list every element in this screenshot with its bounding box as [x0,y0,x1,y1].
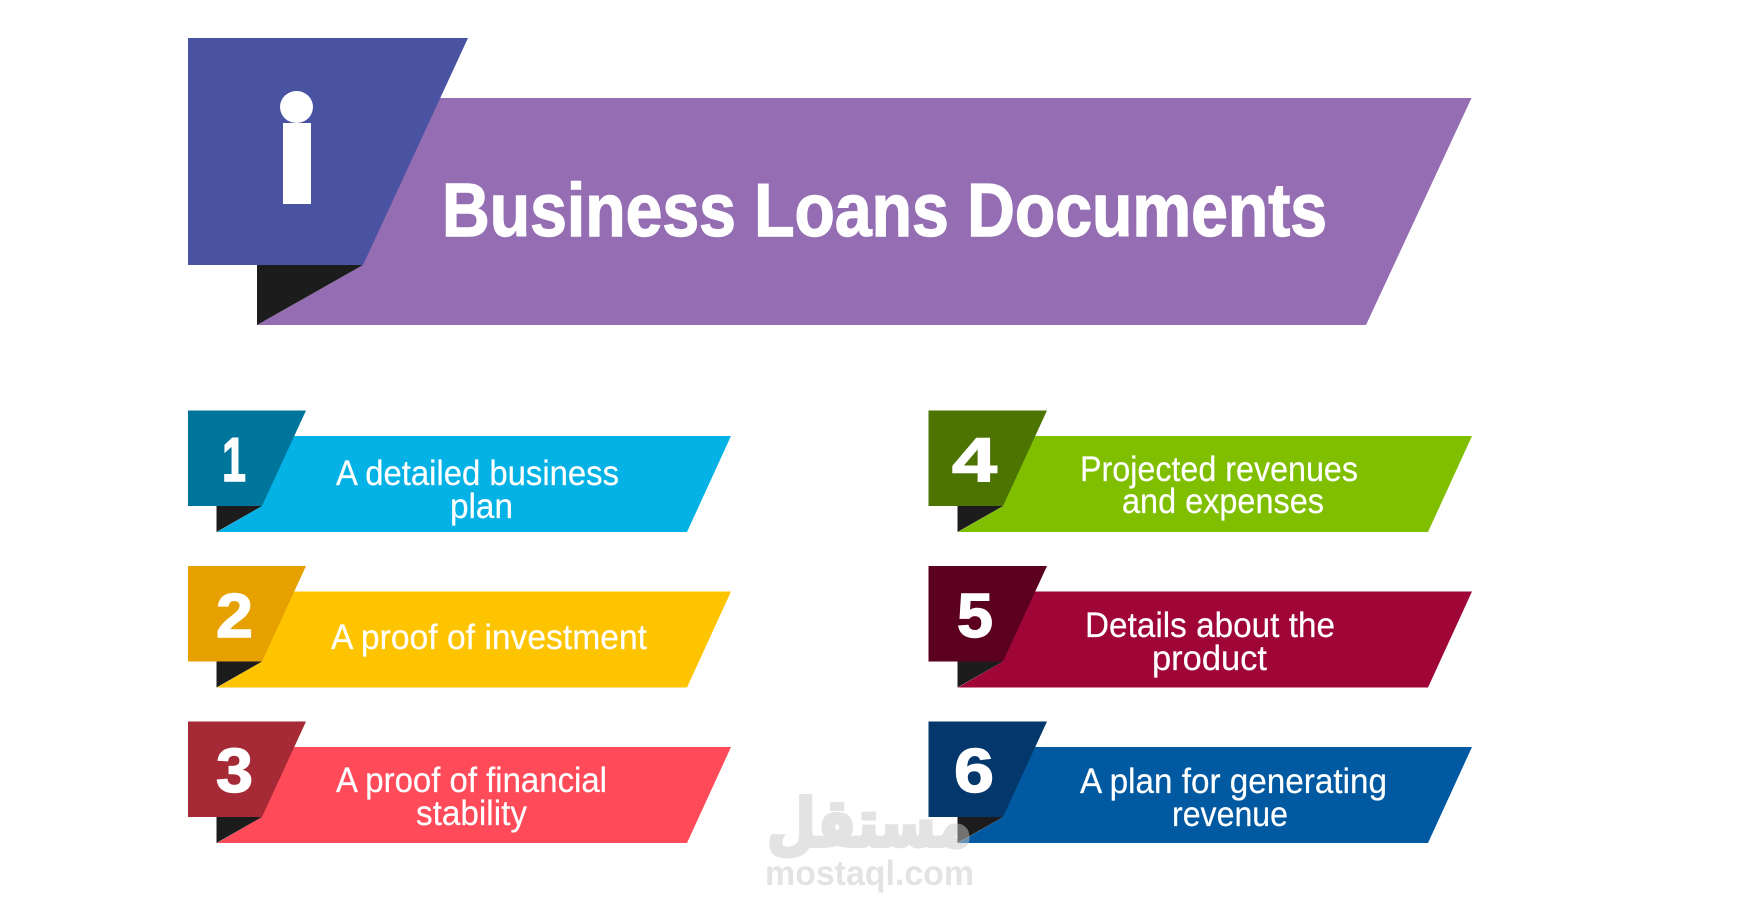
item 4: projected revenues and expenses: Projected revenues [1080,450,1358,489]
title: Business Loans Documents [442,168,1327,252]
item 2: proof of investment: A proof of investment [331,618,647,657]
item 5: details about the product: product [1152,639,1267,678]
item 6: plan for generating revenue: A plan for generating [1080,762,1387,801]
item 1: detailed business plan: 1 [222,426,246,495]
item 4: projected revenues and expenses [928,410,1472,532]
item 6: plan for generating revenue [928,722,1472,843]
item 5: details about the product: 5 [957,582,993,651]
watermark: latin wordmark: mostaql.com [765,854,974,893]
header banner [188,38,1472,325]
item 1: detailed business plan: A detailed business [336,454,619,493]
item 3: proof of financial stability [188,722,731,843]
item 3: proof of financial stability: stability [416,794,527,833]
item 6: plan for generating revenue: 6 [954,737,994,806]
item 1: detailed business plan: plan [450,487,513,526]
item 5: details about the product [928,566,1472,688]
item 2: proof of investment [188,566,731,688]
header tag: blue [188,38,468,265]
item 6: plan for generating revenue: revenue [1172,795,1288,834]
watermark: Arabic wordmark: مستقل [767,785,972,862]
item 1: detailed business plan [188,410,731,532]
watermark [765,785,974,893]
item 3: proof of financial stability: A proof of financial [336,761,607,800]
item 2: proof of investment: 2 [216,582,253,651]
icon: information letter i [280,91,313,204]
item 5: details about the product: Details about the [1085,606,1335,645]
item 4: projected revenues and expenses: and expenses [1122,482,1324,521]
item 4: projected revenues and expenses: 4 [952,426,998,495]
header ribbon: purple [257,98,1472,325]
item 3: proof of financial stability: 3 [216,737,253,806]
header fold shadow [257,265,363,325]
